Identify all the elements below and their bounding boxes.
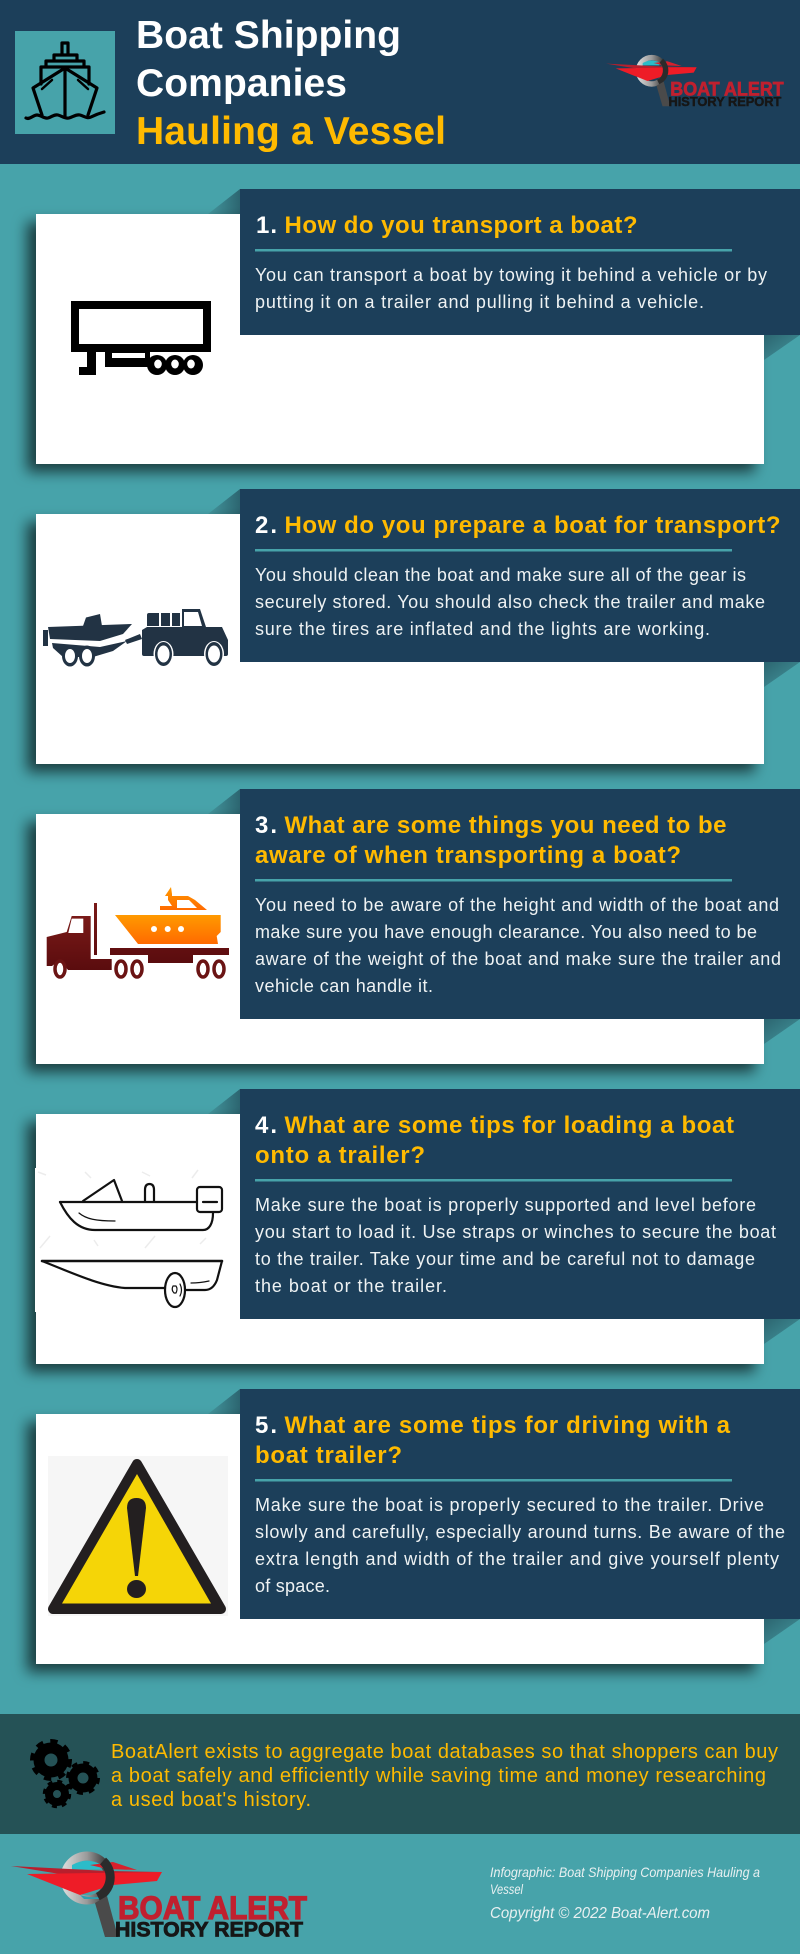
callout text: a boat safely and efficiently while saving time and money researching — [111, 1765, 766, 1787]
callout text — [111, 1741, 778, 1811]
callout band — [0, 1714, 800, 1834]
panel: question 1: You can transport a boat by towing it behind a vehicle or by — [255, 265, 767, 285]
panel: card 1 — [36, 189, 800, 464]
footer credits: Infographic: Boat Shipping Companies Hauling a — [490, 1864, 760, 1880]
panel: card 3 — [36, 789, 800, 1064]
panel: question 3: aware of when transporting a boat? — [255, 842, 681, 869]
icon: boat line drawing — [35, 1168, 240, 1312]
logo: header: HISTORY REPORT — [669, 95, 782, 109]
panel: question 3: What are some things you need to be — [284, 812, 726, 839]
panel: question 4: you start to load it. Use straps or winches to secure the boat — [255, 1222, 776, 1242]
panel: question 3: You need to be aware of the height and width of the boat and — [255, 895, 779, 915]
panel: question 5: slowly and carefully, especially around turns. Be aware of the — [255, 1522, 785, 1542]
panel: question 3: 3. — [255, 812, 277, 839]
panel: question 2 — [240, 489, 800, 662]
logo: footer: BOAT ALERT — [118, 1890, 307, 1926]
panel: question 5: 5. — [255, 1412, 277, 1439]
icon: warning triangle — [48, 1456, 228, 1616]
icon: gears — [33, 1742, 98, 1806]
panel: question 5: Make sure the boat is properly secured to the trailer. Drive — [255, 1495, 764, 1515]
title — [136, 14, 446, 153]
title: Boat Shipping — [136, 14, 401, 57]
panel: question 4: 4. — [255, 1112, 277, 1139]
panel: question 5: What are some tips for driving with a — [284, 1412, 731, 1439]
panel: card 5 — [36, 1389, 800, 1664]
callout text: a used boat's history. — [111, 1789, 311, 1811]
icon: ship — [15, 31, 115, 134]
panel: question 2: How do you prepare a boat for transport? — [284, 512, 780, 539]
footer credits: Vessel — [490, 1881, 524, 1897]
panel: card 4 — [35, 1089, 800, 1364]
panel: card 2 — [36, 489, 800, 764]
panel: question 2: 2. — [255, 512, 277, 539]
footer credits: Copyright © 2022 Boat-Alert.com — [490, 1905, 710, 1922]
logo: header: BOAT ALERT — [670, 79, 784, 100]
panel: question 5: of space. — [255, 1576, 330, 1596]
panel: question 3: vehicle can handle it. — [255, 976, 433, 996]
callout text: BoatAlert exists to aggregate boat databases so that shoppers can buy — [111, 1741, 778, 1763]
panel: question 5: extra length and width of the trailer and give yourself plenty — [255, 1549, 779, 1569]
footer credits — [490, 1864, 760, 1922]
panel: question 2: securely stored. You should also check the trailer and make — [255, 592, 765, 612]
panel: question 3 — [240, 789, 800, 1019]
title: Hauling a Vessel — [136, 110, 446, 153]
panel: question 1: 1. — [256, 212, 277, 239]
logo: footer: HISTORY REPORT — [115, 1918, 303, 1942]
logo: footer — [11, 1856, 307, 1942]
panel: question 5 — [240, 1389, 800, 1619]
panel: question 1 — [240, 189, 800, 335]
panel: question 4: Make sure the boat is properly supported and level before — [255, 1195, 756, 1215]
panel: question 1: How do you transport a boat? — [284, 212, 638, 239]
panel: question 2: sure the tires are inflated and the lights are working. — [255, 619, 710, 639]
icon: truck towing boat — [43, 609, 228, 667]
panel: question 4: onto a trailer? — [255, 1142, 425, 1169]
panel: question 2: You should clean the boat and make sure all of the gear is — [255, 565, 746, 585]
panel: question 3: make sure you have enough clearance. You also need to be — [255, 922, 757, 942]
panel: question 5: boat trailer? — [255, 1442, 402, 1469]
panel: question 4: the boat or the trailer. — [255, 1276, 447, 1296]
panel: question 3: aware of the weight of the boat and make sure the trailer and — [255, 949, 781, 969]
panel: question 4 — [240, 1089, 800, 1319]
header band — [0, 0, 800, 164]
logo: header — [606, 58, 784, 109]
panel: question 4: to the trailer. Take your time and be careful not to damage — [255, 1249, 755, 1269]
icon: semi trailer — [71, 301, 211, 375]
title: Companies — [136, 62, 347, 105]
panel: question 1: putting it on a trailer and pulling it behind a vehicle. — [255, 292, 704, 312]
panel: question 4: What are some tips for loading a boat — [284, 1112, 734, 1139]
icon: flatbed truck carrying boat — [47, 887, 229, 977]
